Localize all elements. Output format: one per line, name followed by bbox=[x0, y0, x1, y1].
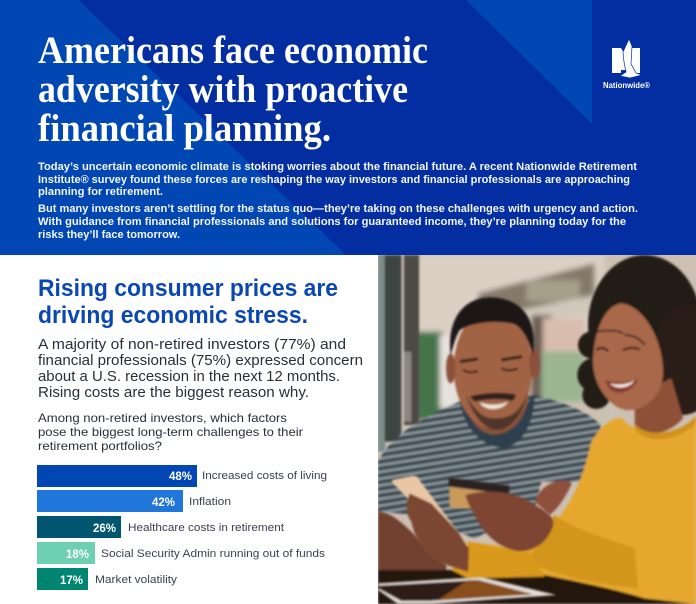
bar: inflation: Inflation bbox=[189, 496, 231, 508]
woman's hair bbox=[586, 255, 696, 356]
text block: recession concern: Rising costs are the biggest reason why. bbox=[38, 384, 309, 401]
bar: inflation: 42% bbox=[152, 497, 175, 509]
bar: market volatility: 17% bbox=[60, 575, 83, 587]
bar: healthcare costs: 26% bbox=[93, 523, 116, 535]
text block: recession concern: A majority of non-retired investors (77%) and bbox=[38, 336, 346, 353]
woman's neck and face bbox=[635, 378, 683, 434]
bar: social security: 18% bbox=[66, 549, 89, 561]
intro text: risks they’ll face tomorrow. bbox=[38, 229, 180, 241]
intro text: Institute® survey found these forces are reshaping the way investors and financial professionals are approaching bbox=[38, 174, 630, 186]
intro text: planning for retirement. bbox=[38, 186, 163, 198]
bar: inflation bbox=[37, 490, 231, 512]
intro text bbox=[38, 161, 638, 241]
title: adversity with proactive bbox=[38, 68, 408, 111]
photo background: door frames bbox=[378, 255, 419, 452]
bar: market volatility: Market volatility bbox=[95, 574, 178, 586]
chart question: Among non-retired investors, which factors bbox=[38, 411, 287, 425]
photo background: cafe building bbox=[415, 255, 615, 425]
bar: increased costs of living: 48% bbox=[169, 471, 192, 483]
phone and card hands bbox=[392, 476, 553, 572]
icon: Nationwide logo bbox=[603, 39, 651, 90]
photo: couple paying with card and phone bbox=[378, 255, 696, 604]
intro text: Today’s uncertain economic climate is stoking worries about the financial future. A recent Nationwide Retirement bbox=[38, 161, 637, 173]
chart question: retirement portfolios? bbox=[38, 439, 162, 453]
chart question bbox=[38, 411, 303, 453]
bar: healthcare costs bbox=[37, 516, 284, 538]
chart question: pose the biggest long-term challenges to their bbox=[38, 425, 303, 439]
bar chart bbox=[37, 465, 327, 590]
man's left hand bbox=[378, 512, 446, 570]
bar: healthcare costs: Healthcare costs in retirement bbox=[128, 522, 284, 534]
sweater bbox=[452, 415, 696, 604]
bar: increased costs of living bbox=[37, 465, 327, 487]
intro text: But many investors aren’t settling for the status quo—they’re taking on these challenges with urgency and action. bbox=[38, 203, 638, 215]
heading: rising consumer prices bbox=[38, 275, 338, 329]
bar: increased costs of living: Increased costs of living bbox=[202, 470, 327, 482]
title: financial planning. bbox=[38, 107, 331, 150]
panel: header banner bbox=[0, 0, 696, 255]
man's head bbox=[461, 365, 528, 434]
man's shirt bbox=[378, 395, 601, 538]
text block: recession concern bbox=[38, 336, 363, 401]
text block: recession concern: financial professionals (75%) expressed concern bbox=[38, 352, 363, 369]
man's forearm bbox=[535, 481, 572, 515]
text block: recession concern: about a U.S. recession in the next 12 months. bbox=[38, 368, 340, 385]
icon: Nationwide logo: Nationwide® bbox=[603, 80, 651, 90]
bar: social security bbox=[37, 542, 326, 564]
tablet bbox=[378, 577, 556, 604]
bar: market volatility bbox=[37, 568, 178, 590]
heading: rising consumer prices: Rising consumer prices are bbox=[38, 275, 338, 302]
intro text: With guidance from financial professionals and solutions for guaranteed income, they’re planning today for the bbox=[38, 216, 626, 228]
title bbox=[38, 29, 428, 150]
bar: social security: Social Security Admin running out of funds bbox=[101, 548, 326, 560]
table bbox=[378, 570, 696, 604]
title: Americans face economic bbox=[38, 29, 428, 72]
heading: rising consumer prices: driving economic stress. bbox=[38, 302, 308, 329]
